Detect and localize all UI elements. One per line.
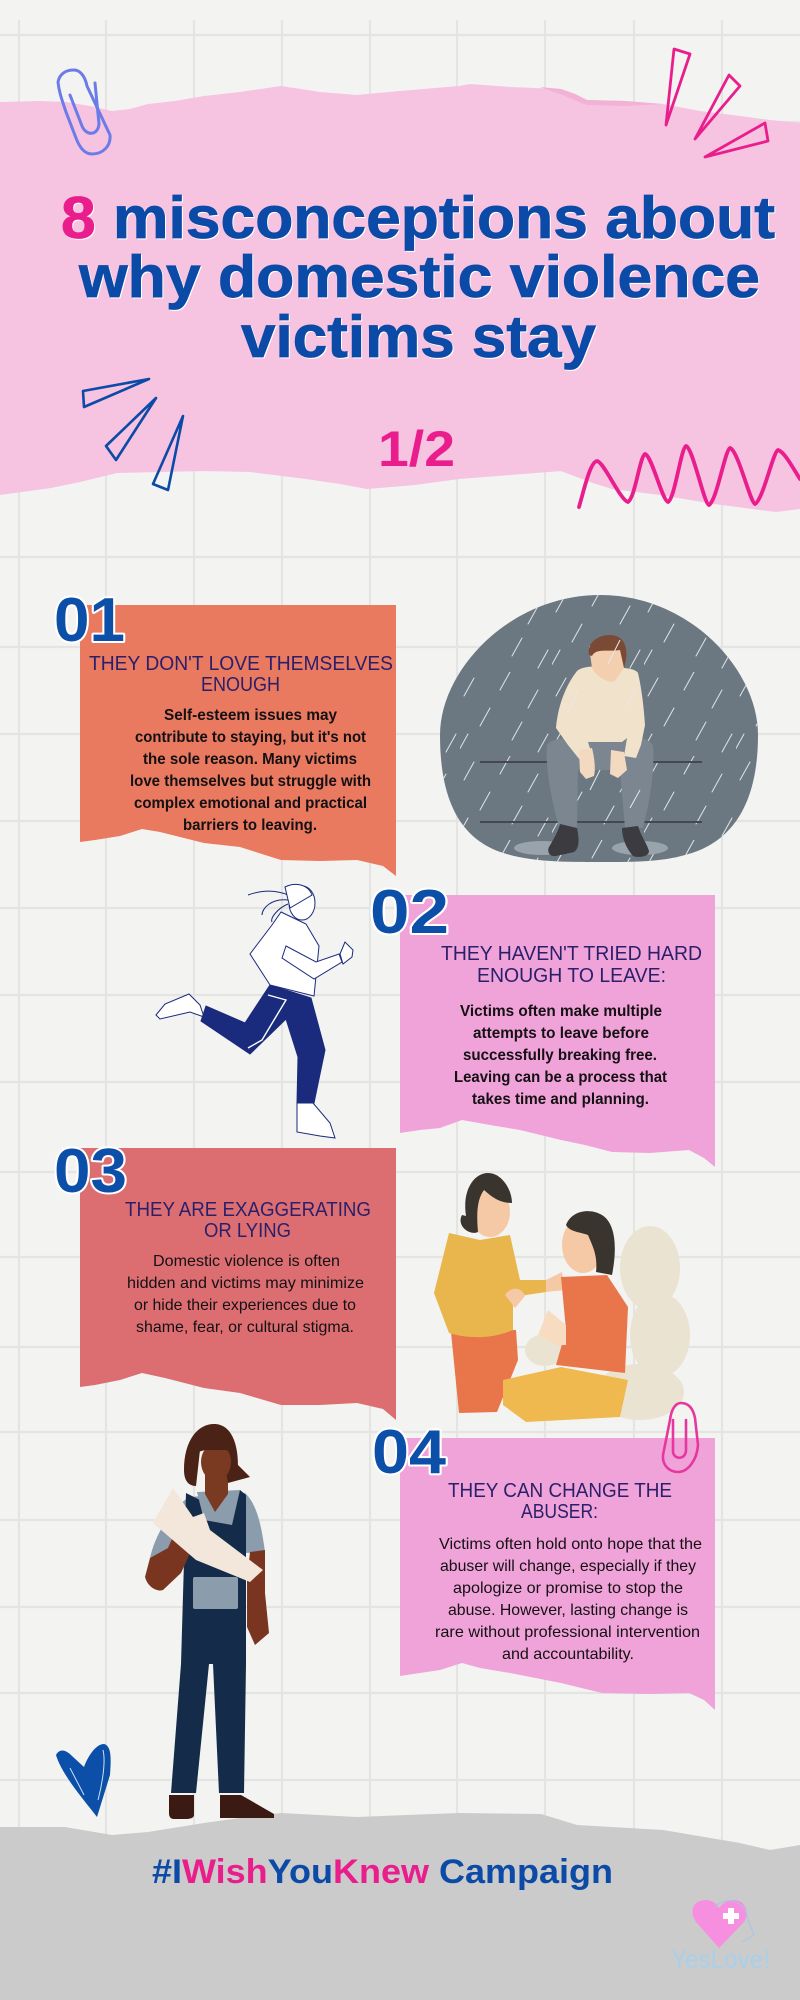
heading 04 bbox=[448, 1479, 672, 1523]
body 04: Victims often hold onto hope that the bbox=[439, 1536, 702, 1553]
body 04: abuser will change, especially if they bbox=[440, 1558, 696, 1575]
body 03 bbox=[127, 1253, 364, 1336]
illustration: two women talking bbox=[434, 1173, 690, 1422]
body 04: and accountability. bbox=[502, 1646, 634, 1663]
body 01: Self-esteem issues may bbox=[164, 707, 337, 724]
heading 03: THEY ARE EXAGGERATING bbox=[125, 1198, 371, 1221]
title bbox=[61, 185, 775, 370]
illustration: running woman bbox=[156, 884, 353, 1138]
body 04: apologize or promise to stop the bbox=[453, 1580, 683, 1597]
logo: YesLove: YesLove! bbox=[671, 1944, 770, 1974]
body 04: rare without professional intervention bbox=[435, 1624, 700, 1641]
number 03: 03 bbox=[54, 1137, 127, 1206]
heading 03: OR LYING bbox=[204, 1219, 291, 1242]
heading 02: ENOUGH TO LEAVE: bbox=[477, 964, 666, 987]
heading 01: ENOUGH bbox=[201, 673, 280, 696]
campaign line: #IWishYouKnew Campaign bbox=[152, 1853, 613, 1891]
body 04 bbox=[435, 1536, 702, 1663]
body 02: takes time and planning. bbox=[472, 1091, 649, 1108]
card background 02 bbox=[400, 895, 715, 1167]
icon: blue paper clip bbox=[58, 70, 110, 154]
body 01: contribute to staying, but it's not bbox=[135, 729, 367, 746]
icon: pink paper clip bbox=[663, 1403, 698, 1472]
body 01: barriers to leaving. bbox=[183, 817, 317, 834]
number 02: 02 bbox=[370, 878, 449, 947]
number 01: 01 bbox=[54, 586, 125, 655]
body 02: Victims often make multiple bbox=[460, 1003, 662, 1020]
heading 01: THEY DON'T LOVE THEMSELVES bbox=[89, 652, 393, 675]
body 03: shame, fear, or cultural stigma. bbox=[136, 1319, 354, 1336]
icon: pink zigzag bbox=[579, 446, 800, 507]
card background 01 bbox=[80, 605, 396, 876]
panel: misconception 01 bbox=[54, 586, 396, 876]
body 01: love themselves but struggle with bbox=[130, 773, 371, 790]
card background 03 bbox=[80, 1148, 396, 1420]
logo: YesLove bbox=[671, 1900, 770, 1974]
panel: misconception 02 bbox=[370, 878, 715, 1167]
panel: misconception 04 bbox=[372, 1418, 715, 1710]
body 04: abuse. However, lasting change is bbox=[448, 1602, 688, 1619]
heading 04: THEY CAN CHANGE THE bbox=[448, 1479, 672, 1502]
card background 04 bbox=[400, 1438, 715, 1710]
heading 01 bbox=[89, 652, 393, 696]
heading 03 bbox=[125, 1198, 371, 1242]
body 03: or hide their experiences due to bbox=[134, 1297, 356, 1314]
body 01: the sole reason. Many victims bbox=[143, 751, 357, 768]
body 03: Domestic violence is often bbox=[153, 1253, 340, 1270]
body 01 bbox=[130, 707, 371, 834]
body 02: successfully breaking free. bbox=[463, 1047, 657, 1064]
page number: 1/2 bbox=[378, 421, 455, 477]
illustration: woman in overalls bbox=[145, 1424, 274, 1819]
icon: pink burst top right bbox=[666, 49, 768, 157]
title: 8 misconceptions about bbox=[61, 185, 775, 251]
heading 02 bbox=[441, 942, 702, 987]
panel: torn pink header bbox=[0, 84, 800, 512]
body 02: attempts to leave before bbox=[473, 1025, 649, 1042]
body 03: hidden and victims may minimize bbox=[127, 1275, 364, 1292]
body 02 bbox=[454, 1003, 668, 1108]
number 04: 04 bbox=[372, 1418, 447, 1487]
title: victims stay bbox=[241, 304, 596, 370]
footer band bbox=[0, 1813, 800, 2000]
panel: misconception 03 bbox=[54, 1137, 396, 1420]
icon: blue heart bbox=[56, 1744, 111, 1817]
title: why domestic violence bbox=[78, 244, 760, 310]
icon: blue burst bottom left bbox=[83, 379, 183, 490]
body 02: Leaving can be a process that bbox=[454, 1069, 668, 1086]
heading 04: ABUSER: bbox=[521, 1500, 598, 1523]
body 01: complex emotional and practical bbox=[134, 795, 367, 812]
illustration: sad man in the rain bbox=[440, 595, 758, 862]
heading 02: THEY HAVEN'T TRIED HARD bbox=[441, 942, 702, 965]
